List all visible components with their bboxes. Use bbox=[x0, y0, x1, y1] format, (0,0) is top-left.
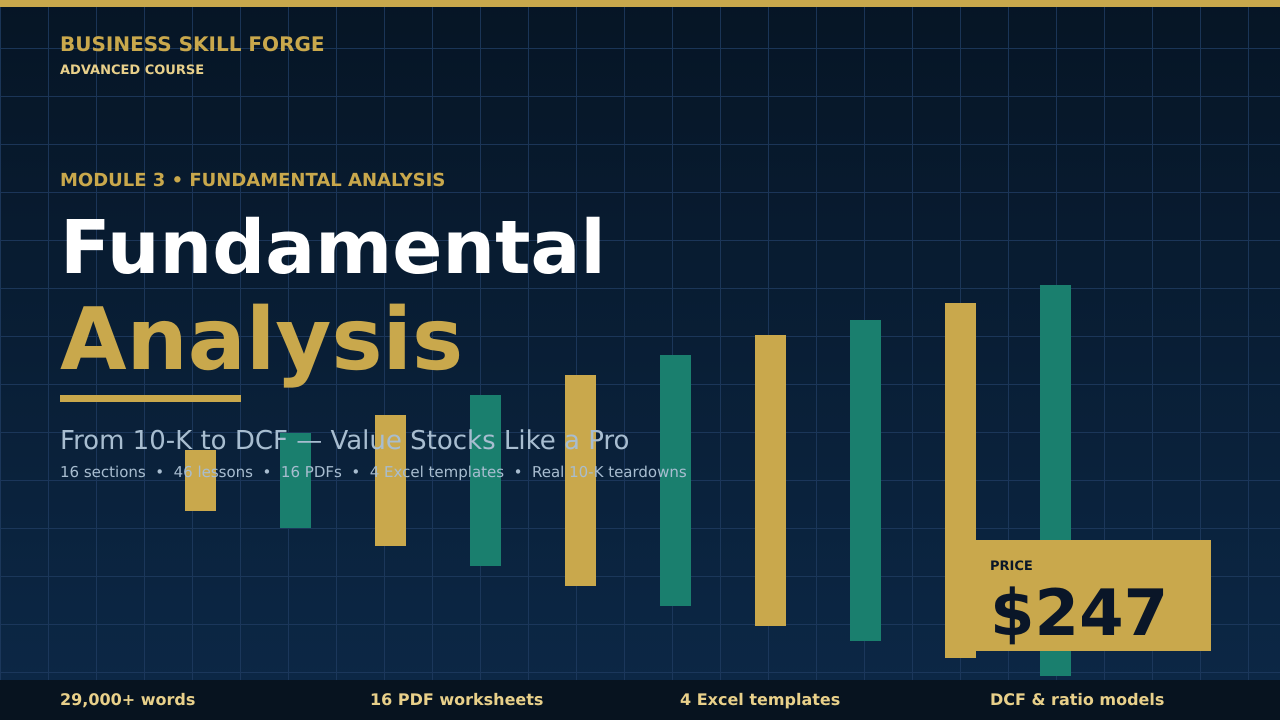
bar chart bbox=[185, 285, 1071, 676]
bar 4 bbox=[470, 395, 501, 566]
title line 2: Analysis bbox=[60, 290, 463, 390]
price callout bbox=[960, 540, 1211, 651]
subtitle: From 10-K to DCF — Value Stocks Like a Pro bbox=[60, 426, 629, 456]
bar 6 bbox=[660, 355, 691, 606]
title line 1: Fundamental bbox=[60, 205, 606, 291]
feature: templates: 4 Excel templates bbox=[680, 690, 840, 709]
brand name: BUSINESS SKILL FORGE bbox=[60, 32, 325, 56]
feature: words: 29,000+ words bbox=[60, 690, 195, 709]
course stats line: 16 sections • 46 lessons • 16 PDFs • 4 Excel templates • Real 10-K teardowns bbox=[60, 463, 687, 481]
brand subtitle: ADVANCED COURSE bbox=[60, 63, 204, 78]
bar 3 bbox=[375, 415, 406, 546]
price label: PRICE bbox=[990, 559, 1033, 574]
feature: worksheets: 16 PDF worksheets bbox=[370, 690, 543, 709]
top accent bar bbox=[0, 0, 1280, 7]
bar 9 bbox=[945, 303, 976, 658]
bar 2 bbox=[280, 433, 311, 528]
title underline bbox=[60, 395, 241, 402]
feature: models: DCF & ratio models bbox=[990, 690, 1164, 709]
bar 10 bbox=[1040, 285, 1071, 676]
price value: $247 bbox=[990, 577, 1168, 651]
module label: MODULE 3 • FUNDAMENTAL ANALYSIS bbox=[60, 170, 445, 191]
bottom feature strip bbox=[0, 680, 1280, 720]
bar 8 bbox=[850, 320, 881, 641]
bar 1 bbox=[185, 450, 216, 511]
bar 5 bbox=[565, 375, 596, 586]
bar 7 bbox=[755, 335, 786, 626]
